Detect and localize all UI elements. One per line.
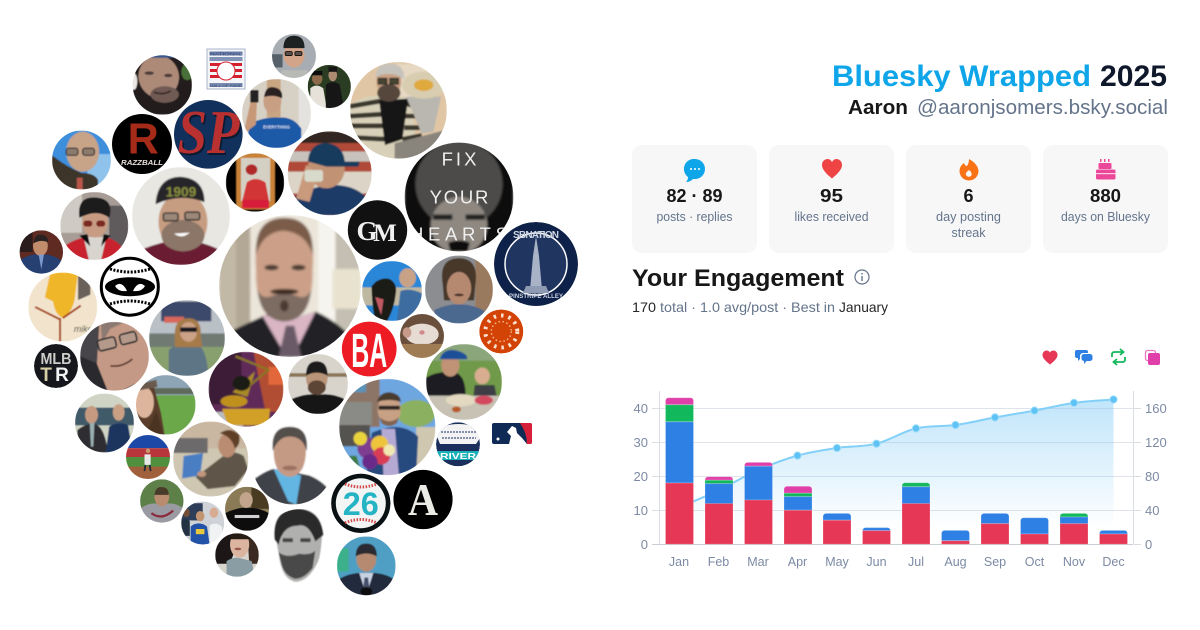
bar: May bbox=[823, 513, 851, 544]
title: 2025 bbox=[1100, 60, 1167, 93]
avatar: woman at green field bbox=[135, 375, 196, 435]
avatar: bearded man in dark shirt bbox=[288, 354, 348, 414]
avatar: Razzball logo bbox=[112, 114, 172, 174]
user name and handle: @aaronjsomers.bsky.social bbox=[917, 97, 1168, 119]
right axis: 160 bbox=[1145, 401, 1167, 416]
avatar: smiling man in blue shirt and blazer bbox=[255, 426, 327, 504]
avatar: GM monogram logo: M bbox=[373, 220, 397, 247]
bar: Mar bbox=[744, 462, 772, 544]
avatar: MLB Trade Rumors logo: T bbox=[40, 365, 52, 386]
avatar: Razzball logo: R bbox=[128, 116, 159, 164]
left axis bbox=[634, 391, 660, 552]
month labels bbox=[669, 555, 1125, 569]
avatar: Fix Your Hearts album art bbox=[405, 140, 513, 254]
avatar: MLB Trade Rumors logo: MLB bbox=[40, 351, 72, 368]
avatar: dark selfie bbox=[132, 55, 192, 115]
icon: Hall of Fame logo: HALL OF FAME bbox=[210, 83, 242, 88]
panel: posting streak stat: streak bbox=[952, 225, 986, 240]
avatar: ceremonial first pitch bbox=[126, 435, 170, 479]
avatar: GM monogram logo: G bbox=[356, 216, 378, 246]
avatar: man with trophy in striped sweater bbox=[350, 62, 447, 159]
avatar: SB Nation Pinstripe Alley logo: PINSTRIPE ALLEY bbox=[509, 294, 563, 300]
avatar: close up selfie with glasses bbox=[80, 322, 149, 391]
avatar: man taking a mirror selfie: EVERYTHING bbox=[263, 125, 290, 130]
icon: repost arrows bbox=[1112, 349, 1125, 365]
panel: days on Bluesky stat bbox=[1043, 145, 1168, 253]
avatar: SB Nation Pinstripe Alley logo bbox=[494, 222, 578, 306]
avatar: GM monogram logo bbox=[348, 200, 408, 260]
avatar: woman at stadium bbox=[149, 300, 225, 376]
icon: Hall of Fame logo bbox=[207, 49, 245, 89]
avatar: number 26 baseball logo: 26 bbox=[343, 486, 379, 522]
chart: monthly engagement bars with cumulative line bbox=[634, 391, 1167, 569]
panel: posts and replies stat bbox=[632, 145, 757, 253]
chart legend icons bbox=[1042, 349, 1160, 365]
avatar: SB Nation Pinstripe Alley logo: SBNATION bbox=[513, 230, 559, 241]
icon: flame bbox=[960, 159, 978, 180]
avatar: man taking a mirror selfie bbox=[242, 79, 311, 148]
avatar: Razzball logo: RAZZBALL bbox=[121, 158, 163, 167]
avatar: baseball card bbox=[226, 153, 284, 212]
avatar: two men at ballpark bbox=[308, 65, 351, 108]
avatar: ninja baseball logo bbox=[100, 257, 160, 317]
icon: birthday cake bbox=[1096, 159, 1116, 180]
right axis: 80 bbox=[1145, 469, 1159, 484]
avatar: Baseball America logo: BA bbox=[351, 325, 387, 378]
month labels: Oct bbox=[1025, 555, 1045, 569]
avatar: man with dog bbox=[362, 261, 422, 321]
icon: MLB logo bbox=[492, 423, 532, 444]
avatar: man with flower bouquet bbox=[339, 379, 436, 475]
left axis: 30 bbox=[634, 435, 648, 450]
panel: likes stat: 95 bbox=[820, 186, 843, 206]
avatar: white rat bbox=[400, 314, 444, 358]
month labels: Jun bbox=[866, 555, 887, 569]
avatar: Fix Your Hearts album art: YOUR bbox=[430, 187, 488, 208]
bar: Sep bbox=[981, 513, 1009, 544]
month labels: Jul bbox=[908, 555, 924, 569]
avatar: Baseball America logo bbox=[342, 322, 397, 378]
avatar: group in blue shirts bbox=[181, 502, 224, 544]
bar: Jun bbox=[862, 528, 890, 544]
avatar: long-haired man bbox=[425, 256, 493, 324]
bar: Oct bbox=[1020, 518, 1048, 544]
left axis: 10 bbox=[634, 503, 648, 518]
avatar: Fix Your Hearts album art: HEARTS bbox=[410, 224, 508, 245]
avatar: man in 1909 cap bbox=[132, 167, 230, 265]
avatar: SP logo: SP bbox=[179, 101, 242, 169]
icon: replies bubbles bbox=[1075, 350, 1092, 364]
panel: posting streak stat: day posting bbox=[936, 209, 1001, 224]
avatar: number 26 baseball logo bbox=[331, 474, 390, 533]
icon: heart bbox=[822, 159, 842, 178]
cumulative area bbox=[679, 400, 1114, 544]
bar: Feb bbox=[705, 477, 733, 544]
avatar: purple desk figure bbox=[208, 352, 284, 427]
avatar: MLB Trade Rumors logo: R bbox=[55, 365, 69, 386]
bar: Nov bbox=[1060, 513, 1088, 544]
panel: days on Bluesky stat: days on Bluesky bbox=[1061, 209, 1150, 224]
engagement summary: 170 bbox=[632, 299, 656, 315]
right axis: 40 bbox=[1145, 503, 1159, 518]
icon: likes heart bbox=[1042, 350, 1058, 364]
avatar: man in 1909 cap: 1909 bbox=[166, 184, 197, 199]
month labels: Dec bbox=[1102, 555, 1125, 569]
avatar: yellow cartoon mike bbox=[28, 272, 97, 342]
panel: posts and replies stat: 82 · 89 bbox=[666, 186, 722, 206]
panel: likes stat bbox=[769, 145, 894, 253]
avatar: broadcaster in suit bbox=[337, 536, 396, 596]
engagement summary: total · 1.0 avg/post · Best in bbox=[660, 299, 835, 315]
left axis: 0 bbox=[641, 537, 648, 552]
avatar: woman in denim jacket bbox=[215, 531, 259, 577]
month labels: Nov bbox=[1063, 555, 1086, 569]
engagement summary bbox=[632, 299, 888, 315]
month labels: Aug bbox=[944, 555, 967, 569]
bar: Jan bbox=[666, 398, 694, 544]
avatar: orange dotted logo bbox=[479, 310, 523, 354]
icon: Hall of Fame logo: NATIONAL bbox=[210, 52, 243, 56]
panel: posts and replies stat: posts · replies bbox=[656, 209, 733, 224]
icon: quote squares bbox=[1146, 350, 1160, 365]
bar: Dec bbox=[1100, 530, 1128, 544]
avatar: Fix Your Hearts album art: FIX bbox=[442, 148, 476, 169]
avatar: older man in black sweatshirt bbox=[225, 487, 269, 531]
title: Bluesky Wrapped bbox=[832, 60, 1091, 93]
panel: posting streak stat: 6 bbox=[963, 186, 974, 206]
avatar: River Ave Blues logo: RIVER bbox=[440, 451, 476, 461]
engagement summary: January bbox=[839, 299, 888, 315]
panel: likes stat: likes received bbox=[794, 209, 868, 224]
right axis: 0 bbox=[1145, 537, 1152, 552]
avatar: man in navy suit bbox=[20, 230, 63, 274]
left axis: 40 bbox=[634, 401, 648, 416]
cumulative points bbox=[715, 396, 1117, 494]
right axis bbox=[1134, 391, 1167, 552]
left axis: 20 bbox=[634, 469, 648, 484]
right axis: 120 bbox=[1145, 435, 1167, 450]
cumulative line bbox=[679, 400, 1114, 507]
avatar: man in red jacket bbox=[60, 192, 128, 260]
avatar: MLB Trade Rumors logo bbox=[34, 344, 78, 388]
icon: chat bubble bbox=[684, 159, 705, 182]
panel: avatar bubble cluster bbox=[20, 34, 578, 596]
avatar: Twins player bbox=[140, 479, 184, 523]
month labels: Apr bbox=[788, 555, 807, 569]
avatar: two broadcasters bbox=[75, 394, 134, 452]
month labels: Sep bbox=[984, 555, 1006, 569]
month labels: Mar bbox=[747, 555, 769, 569]
avatar: central profile photo of Aaron bbox=[219, 215, 361, 357]
avatar: man at laptop in press box bbox=[173, 421, 248, 497]
avatar: man on phone in Red Sox cap bbox=[288, 131, 372, 215]
baseline bbox=[652, 544, 1133, 546]
heading: Your Engagement: Your Engagement bbox=[632, 265, 844, 292]
avatar: man in black cap bbox=[272, 34, 316, 78]
month labels: May bbox=[825, 555, 850, 569]
panel: days on Bluesky stat: 880 bbox=[1090, 186, 1121, 206]
avatar: SP logo: SP bbox=[178, 99, 240, 167]
avatar: family eating outdoors bbox=[426, 344, 502, 420]
bar: Aug bbox=[942, 530, 970, 544]
avatar: The Athletic logo: A bbox=[408, 474, 438, 525]
icon: info bbox=[855, 270, 869, 284]
bar: Jul bbox=[902, 483, 930, 544]
user name and handle: Aaron bbox=[848, 97, 908, 119]
month labels: Feb bbox=[708, 555, 729, 569]
month labels: Jan bbox=[669, 555, 689, 569]
panel: posting streak stat bbox=[906, 145, 1031, 253]
avatar: River Ave Blues logo bbox=[436, 422, 480, 466]
avatar: glasses man with blue background bbox=[52, 130, 111, 190]
avatar: black and white bearded portrait bbox=[274, 509, 324, 582]
avatar: The Athletic logo bbox=[393, 470, 453, 529]
avatar: yellow cartoon mike: mike bbox=[74, 324, 93, 334]
bar: Apr bbox=[784, 486, 812, 544]
